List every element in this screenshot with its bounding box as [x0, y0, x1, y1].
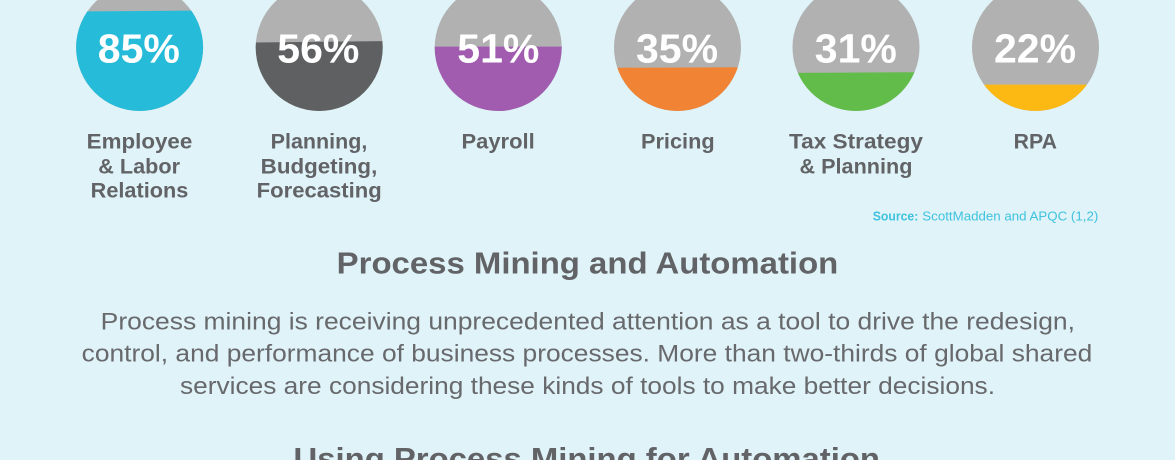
gauge circle 56%: 56%	[277, 26, 359, 72]
body paragraph: Process mining is receiving unprecedented attention as a tool to drive the redesign,	[101, 308, 1075, 335]
chart: Planning, Budgeting, Forecasting 56%	[250, 0, 390, 203]
label: Employee and Labor Relations	[87, 130, 192, 203]
label: RPA: RPA	[1014, 130, 1057, 153]
body paragraph	[82, 308, 1092, 400]
gauge circle 35%	[610, 0, 745, 115]
gauge circle 51%	[434, 0, 562, 111]
label: Planning, Budgeting, Forecasting	[257, 130, 382, 203]
label: Employee and Labor Relations: Relations	[91, 180, 188, 203]
chart: Employee and Labor Relations 85%	[76, 0, 204, 198]
gauge circle 22%	[972, 0, 1099, 111]
gauge circle 85%: 85%	[98, 26, 180, 72]
label: Payroll: Payroll	[462, 130, 535, 153]
heading: Process Mining and Automation: Process Mining and Automation	[337, 245, 838, 280]
chart: RPA 22%	[972, 0, 1099, 148]
gauge circle 56%	[256, 0, 383, 111]
label: Tax Strategy and Planning	[789, 130, 923, 178]
gauge circle 31%: 31%	[815, 26, 897, 72]
chart: Payroll 51%	[430, 0, 570, 153]
body paragraph: control, and performance of business processes. More than two-thirds of global shared	[82, 341, 1092, 368]
gauge circle 22%: 22%	[994, 26, 1076, 72]
label: Planning, Budgeting, Forecasting: Forecasting	[257, 180, 382, 203]
label: Planning, Budgeting, Forecasting: Planning,	[271, 130, 367, 153]
source note: Source:	[873, 210, 918, 224]
source note: ScottMadden and APQC (1,2)	[922, 210, 1098, 224]
label: Tax Strategy and Planning: Tax Strategy	[789, 130, 923, 153]
chart: Tax Strategy and Planning 31%	[788, 0, 925, 178]
label: Planning, Budgeting, Forecasting: Budgeting,	[261, 155, 377, 178]
body paragraph: services are considering these kinds of tools to make better decisions.	[180, 373, 995, 400]
gauge circle 31%	[792, 0, 920, 111]
gauge circle 85%	[76, 0, 204, 111]
label: Pricing: Pricing	[641, 130, 715, 153]
label: Employee and Labor Relations: & Labor	[98, 155, 180, 178]
label: Tax Strategy and Planning: & Planning	[800, 155, 912, 178]
chart: Pricing 35%	[610, 0, 745, 153]
label: Employee and Labor Relations: Employee	[87, 130, 192, 153]
gauge circle 35%: 35%	[636, 26, 718, 72]
gauge circle 51%: 51%	[457, 26, 539, 72]
